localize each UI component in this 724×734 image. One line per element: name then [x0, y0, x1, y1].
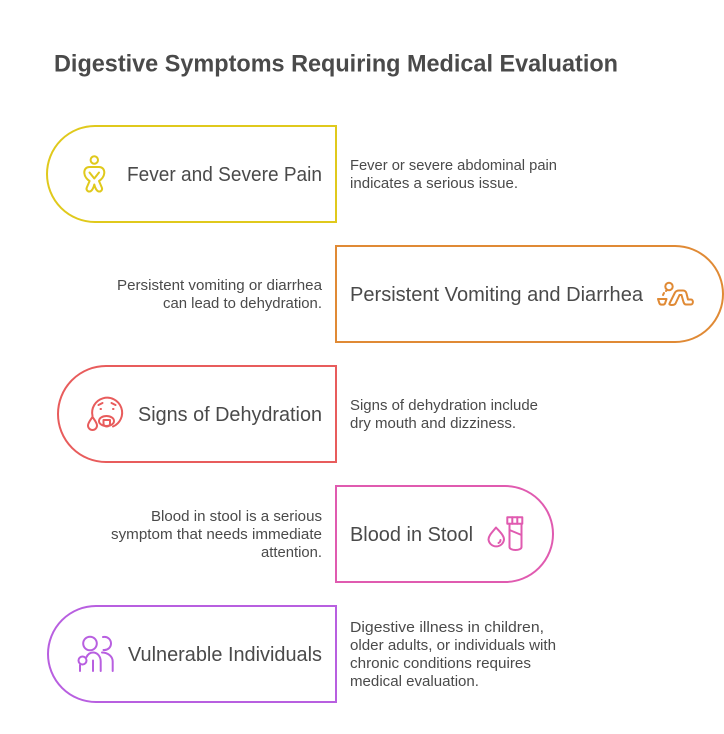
heading: persistent vomiting and diarrhea: Persistent Vomiting and Diarrhea [350, 284, 644, 306]
description: fever: Fever or severe abdominal pain [350, 158, 557, 174]
description: blood: symptom that needs immediate [111, 527, 322, 543]
description: fever [350, 158, 557, 192]
heading: signs of dehydration: Signs of Dehydration [138, 404, 322, 426]
heading: vulnerable individuals: Vulnerable Individuals [128, 644, 322, 666]
icon: blood drop and test tube [488, 517, 522, 550]
pill outline: vulnerable [48, 606, 336, 702]
description: vulnerable [350, 620, 556, 690]
panel: signs of dehydration [58, 366, 538, 462]
description: blood: attention. [261, 545, 322, 561]
pill outline: dehydration [58, 366, 336, 462]
description: vulnerable: Digestive illness in children, [350, 620, 544, 636]
heading: blood in stool: Blood in Stool [350, 524, 473, 546]
description: vomiting: can lead to dehydration. [163, 296, 322, 312]
panel: fever and severe pain [47, 126, 557, 222]
icon: person crawling and vomiting [658, 283, 693, 305]
description: dehydration [350, 398, 538, 432]
description: blood [111, 509, 322, 561]
heading: fever and severe pain: Fever and Severe Pain [127, 164, 322, 186]
description: blood: Blood in stool is a serious [151, 509, 322, 525]
icon: person holding abdomen [84, 156, 104, 192]
panel: vulnerable individuals [48, 606, 556, 702]
description: vulnerable: older adults, or individuals with [350, 638, 556, 654]
pill outline: blood [336, 486, 553, 582]
description: vulnerable: medical evaluation. [350, 674, 479, 690]
description: vulnerable: chronic conditions requires [350, 656, 531, 672]
pill outline: fever [47, 126, 336, 222]
description: vomiting [117, 278, 322, 312]
title: Digestive Symptoms Requiring Medical Evaluation [54, 50, 618, 78]
panel: persistent vomiting and diarrhea [117, 246, 723, 342]
pill outline: vomiting [336, 246, 723, 342]
description: dehydration: Signs of dehydration include [350, 398, 538, 414]
panel: blood in stool [111, 486, 553, 582]
description: fever: indicates a serious issue. [350, 176, 518, 192]
icon: sick face with tongue and drop [88, 398, 122, 430]
description: vomiting: Persistent vomiting or diarrhea [117, 278, 322, 294]
icon: group of people [78, 637, 113, 671]
description: dehydration: dry mouth and dizziness. [350, 416, 516, 432]
